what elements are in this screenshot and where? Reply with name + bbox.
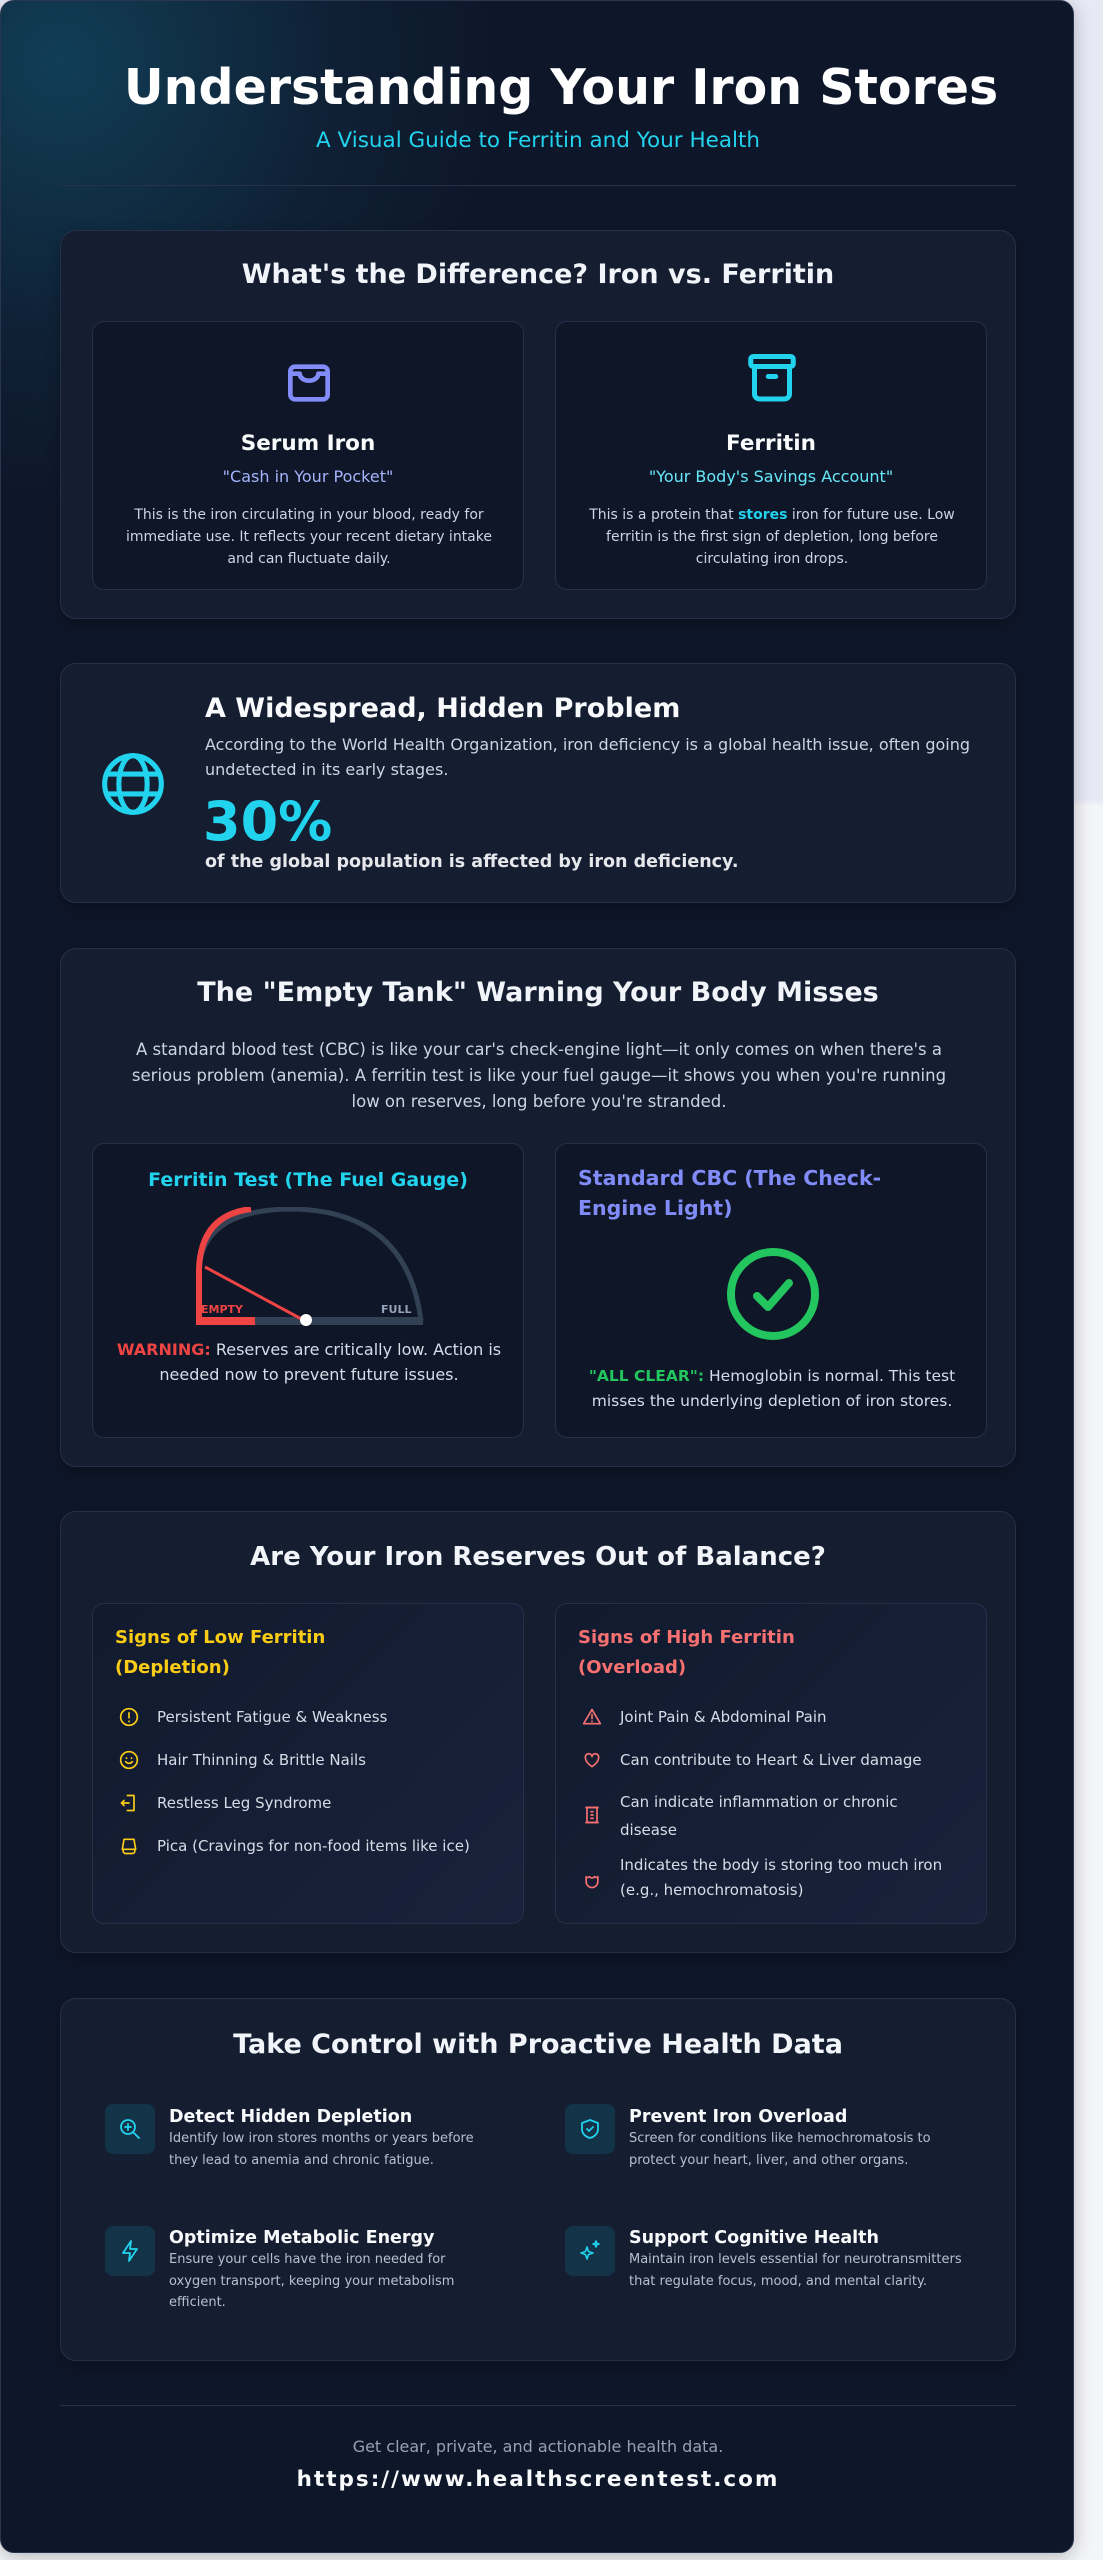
footer url: https://www.healthscreentest.com bbox=[297, 2467, 779, 2492]
card: low ferritin bbox=[92, 1603, 524, 1924]
list item: Pica (Cravings for non-food items like ice) bbox=[157, 1837, 470, 1855]
stat caption: of the global population is affected by iron deficiency. bbox=[205, 852, 738, 872]
card title bbox=[115, 1627, 325, 1678]
list item: Indicates the body is storing too much iron (e.g., hemochromatosis) bbox=[620, 1856, 942, 1899]
item: energy: Optimize Metabolic Energy bbox=[169, 2228, 434, 2248]
description: This is a protein that stores iron for future use. Low ferritin is the first sign of depletion, long before circulating iron drops. bbox=[589, 507, 955, 567]
chart: fuel gauge bbox=[196, 1207, 424, 1326]
heading: What's the Difference? Iron vs. Ferritin bbox=[242, 259, 834, 290]
card: standard cbc bbox=[555, 1143, 987, 1438]
list item: Can contribute to Heart & Liver damage bbox=[620, 1751, 922, 1769]
item: detect: Detect Hidden Depletion bbox=[169, 2107, 412, 2127]
panel: widespread problem bbox=[60, 663, 1016, 903]
panel: take control bbox=[60, 1998, 1016, 2361]
tagline: "Your Body's Savings Account" bbox=[649, 467, 893, 486]
warning text: WARNING: Reserves are critically low. Action is needed now to prevent future issues. bbox=[117, 1340, 501, 1384]
card title: Engine Light) bbox=[578, 1196, 732, 1220]
list item: Persistent Fatigue & Weakness bbox=[157, 1708, 387, 1726]
card: ferritin gauge bbox=[92, 1143, 524, 1438]
item: cognitive bbox=[565, 2226, 962, 2288]
item: prevent: Screen for conditions like hemochromatosis to protect your heart, liver, and other organs. bbox=[629, 2131, 931, 2168]
card title bbox=[578, 1627, 795, 1678]
icon: check circle bbox=[727, 1248, 819, 1340]
card title: Signs of High Ferritin bbox=[578, 1627, 795, 1648]
icon: pocket bbox=[288, 364, 330, 402]
panel: iron vs ferritin bbox=[60, 230, 1016, 619]
item: prevent bbox=[565, 2104, 931, 2168]
title: Serum Iron bbox=[241, 431, 375, 456]
card title: Standard CBC (The Check- bbox=[578, 1166, 881, 1190]
tagline: "Cash in Your Pocket" bbox=[223, 467, 393, 486]
icon: archive bbox=[748, 354, 796, 402]
heading: A Widespread, Hidden Problem bbox=[205, 693, 680, 724]
card: ferritin bbox=[555, 321, 987, 590]
list item: Restless Leg Syndrome bbox=[157, 1794, 331, 1812]
list item: Can indicate inflammation or chronic disease bbox=[620, 1793, 898, 1839]
icon: bolt bbox=[105, 2226, 155, 2276]
icon: zoom bbox=[105, 2104, 155, 2154]
list item: Joint Pain & Abdominal Pain bbox=[620, 1708, 827, 1726]
description: According to the World Health Organization, iron deficiency is a global health issue, often going undetected in its early stages. bbox=[205, 735, 970, 779]
stat: 30%: 30% bbox=[203, 790, 332, 853]
subtitle: A Visual Guide to Ferritin and Your Health bbox=[316, 128, 760, 153]
panel: empty tank bbox=[60, 948, 1016, 1467]
card: serum iron bbox=[92, 321, 524, 590]
heading: Are Your Iron Reserves Out of Balance? bbox=[250, 1542, 826, 1572]
panel: out of balance bbox=[60, 1511, 1016, 1953]
footer text: Get clear, private, and actionable health data. bbox=[353, 2437, 723, 2456]
intro text: A standard blood test (CBC) is like your car's check-engine light—it only comes on when there's a serious problem (anemia). A ferritin test is like your fuel gauge—it shows you when you're running low on reserves, long before you're stranded. bbox=[132, 1040, 946, 1111]
title: Understanding Your Iron Stores bbox=[124, 59, 998, 116]
description: This is the iron circulating in your blood, ready for immediate use. It reflects your recent dietary intake and can fluctuate daily. bbox=[126, 507, 492, 567]
card title: (Depletion) bbox=[115, 1657, 230, 1678]
item: cognitive: Maintain iron levels essential for neurotransmitters that regulate focus, mood, and mental clarity. bbox=[629, 2252, 962, 2288]
icon: shield bbox=[565, 2104, 615, 2154]
item: prevent: Prevent Iron Overload bbox=[629, 2107, 847, 2127]
item: energy: Ensure your cells have the iron needed for oxygen transport, keeping your metabolism efficient. bbox=[169, 2252, 454, 2310]
heading: The "Empty Tank" Warning Your Body Misses bbox=[197, 977, 879, 1008]
card title: Ferritin Test (The Fuel Gauge) bbox=[148, 1169, 468, 1191]
icon: globe bbox=[102, 753, 164, 815]
item: energy bbox=[105, 2226, 454, 2310]
chart: fuel gauge: FULL bbox=[381, 1303, 411, 1316]
all clear text: "ALL CLEAR": Hemoglobin is normal. This test misses the underlying depletion of iron stores. bbox=[589, 1367, 955, 1410]
icon: sparkles bbox=[565, 2226, 615, 2276]
item: detect bbox=[105, 2104, 474, 2168]
card title: (Overload) bbox=[578, 1657, 686, 1678]
heading: Take Control with Proactive Health Data bbox=[233, 2029, 843, 2060]
chart: fuel gauge: EMPTY bbox=[201, 1303, 244, 1316]
card: high ferritin bbox=[555, 1603, 987, 1924]
item: detect: Identify low iron stores months or years before they lead to anemia and chronic fatigue. bbox=[169, 2131, 474, 2168]
title: Ferritin bbox=[726, 431, 816, 456]
card title: Signs of Low Ferritin bbox=[115, 1627, 325, 1648]
item: cognitive: Support Cognitive Health bbox=[629, 2228, 879, 2248]
card title bbox=[578, 1166, 881, 1220]
list item: Hair Thinning & Brittle Nails bbox=[157, 1751, 366, 1769]
